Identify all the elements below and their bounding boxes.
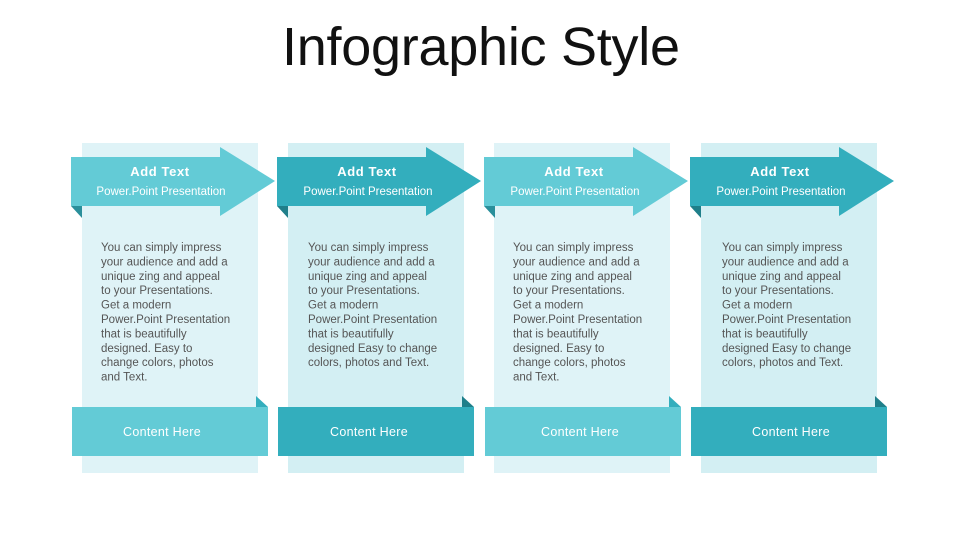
text block 3: unique zing and appeal xyxy=(513,271,632,283)
footer band 4 xyxy=(691,396,887,456)
arrow 1: Power.Point Presentation xyxy=(96,186,226,198)
text block 2: Get a modern xyxy=(308,300,378,312)
title: Infographic Style xyxy=(282,17,680,77)
text block 2: to your Presentations. xyxy=(308,285,420,297)
text block 2: designed Easy to change xyxy=(308,343,437,355)
text block 3: to your Presentations. xyxy=(513,285,625,297)
text block 2: that is beautifully xyxy=(308,328,394,340)
arrow 1 xyxy=(71,147,275,218)
footer band 1: Content Here xyxy=(123,425,201,439)
text block 4: You can simply impress xyxy=(722,242,843,254)
text block 1: and Text. xyxy=(101,372,147,384)
text block 1: designed. Easy to xyxy=(101,343,192,355)
arrow 2 xyxy=(277,147,481,218)
arrow 2: Add Text xyxy=(337,164,397,179)
arrow 4: Power.Point Presentation xyxy=(716,186,846,198)
text block 3: change colors, photos xyxy=(513,357,626,369)
footer band 2 xyxy=(278,396,474,456)
text block 2: You can simply impress xyxy=(308,242,429,254)
text block 3: your audience and add a xyxy=(513,256,640,268)
text block 3: designed. Easy to xyxy=(513,343,604,355)
text block 4: to your Presentations. xyxy=(722,285,834,297)
text block 4: Power.Point Presentation xyxy=(722,314,851,326)
text block 4: designed Easy to change xyxy=(722,343,851,355)
text block 1: Get a modern xyxy=(101,300,171,312)
arrow 3: Add Text xyxy=(544,164,604,179)
text block 2: unique zing and appeal xyxy=(308,271,427,283)
footer band 3: Content Here xyxy=(541,425,619,439)
text block 3: and Text. xyxy=(513,372,559,384)
footer band 3 xyxy=(485,396,681,456)
text block 3: You can simply impress xyxy=(513,242,634,254)
arrow 3 xyxy=(484,147,688,218)
text block 1: Power.Point Presentation xyxy=(101,314,230,326)
footer band 4: Content Here xyxy=(752,425,830,439)
footer band 2: Content Here xyxy=(330,425,408,439)
text block 2: Power.Point Presentation xyxy=(308,314,437,326)
text block 1: You can simply impress xyxy=(101,242,222,254)
text block 4: colors, photos and Text. xyxy=(722,357,843,369)
arrow 2: Power.Point Presentation xyxy=(303,186,433,198)
text block 1: that is beautifully xyxy=(101,328,187,340)
arrow 4 xyxy=(690,147,894,218)
text block 1: unique zing and appeal xyxy=(101,271,220,283)
panel: column 1 xyxy=(71,143,275,473)
text block 2: your audience and add a xyxy=(308,256,435,268)
text block 1: your audience and add a xyxy=(101,256,228,268)
panel: column 3 xyxy=(484,143,688,473)
panel: column 2 xyxy=(277,143,481,473)
text block 4: Get a modern xyxy=(722,300,792,312)
text block 1: change colors, photos xyxy=(101,357,214,369)
footer band 1 xyxy=(72,396,268,456)
arrow 1: Add Text xyxy=(130,164,190,179)
text block 4: unique zing and appeal xyxy=(722,271,841,283)
text block 3: Get a modern xyxy=(513,300,583,312)
text block 3: that is beautifully xyxy=(513,328,599,340)
text block 3: Power.Point Presentation xyxy=(513,314,642,326)
text block 4: your audience and add a xyxy=(722,256,849,268)
text block 1: to your Presentations. xyxy=(101,285,213,297)
panel: column 4 xyxy=(690,143,894,473)
arrow 4: Add Text xyxy=(750,164,810,179)
text block 4: that is beautifully xyxy=(722,328,808,340)
arrow 3: Power.Point Presentation xyxy=(510,186,640,198)
text block 2: colors, photos and Text. xyxy=(308,357,429,369)
